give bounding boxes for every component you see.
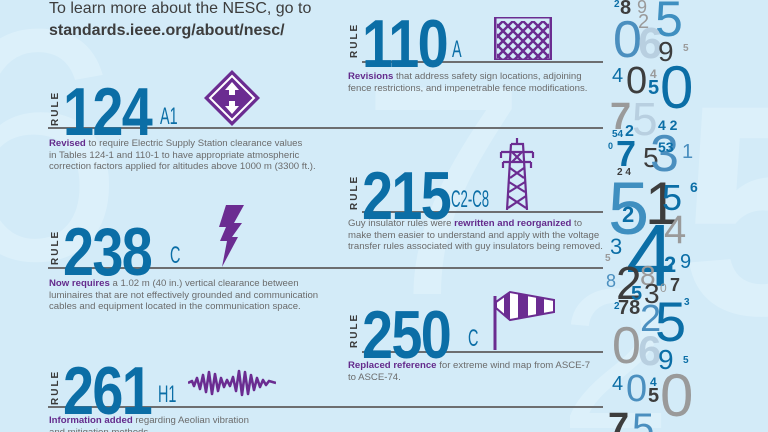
numeral column decoration: 2 xyxy=(625,123,634,140)
rule 238C: 238 xyxy=(63,214,151,290)
rule 124A1: RULE xyxy=(50,91,61,126)
rule 238C xyxy=(49,205,318,312)
numeral column decoration: 2 xyxy=(664,252,676,277)
rule 215C2-C8: RULE xyxy=(349,175,360,210)
rule 215C2-C8: transfer rules associated with guy insulators being removed. xyxy=(348,241,603,252)
rule 261H1: 261 xyxy=(63,353,151,429)
numeral column decoration: 2 xyxy=(638,11,649,33)
rule 124A1: Revised to require Electric Supply Station clearance values xyxy=(49,138,302,149)
rule 261H1: Information added regarding Aeolian vibration xyxy=(49,415,249,426)
numeral column decoration: 0 xyxy=(660,54,693,121)
numeral column decoration: 4 xyxy=(612,65,623,87)
numeral column decoration: 5 xyxy=(662,177,682,218)
background faint numerals: 7 xyxy=(360,22,527,358)
icon: fence xyxy=(494,17,552,60)
rule 215C2-C8: 215 xyxy=(362,158,450,234)
rule 215C2-C8: make them easier to understand and apply with the voltage xyxy=(348,230,599,240)
numeral column decoration: 9 xyxy=(658,344,674,375)
numeral column decoration: 1 xyxy=(682,141,693,163)
numeral column decoration: 0 xyxy=(613,11,642,69)
rule 238C: C xyxy=(170,242,180,269)
numeral column decoration: 4 xyxy=(612,373,623,395)
numeral column decoration: 5 xyxy=(683,355,689,366)
numeral column decoration: 2 4 xyxy=(617,167,631,178)
numeral column decoration: 7 xyxy=(616,133,636,174)
numeral column decoration: 0 xyxy=(608,141,613,151)
rule 250C xyxy=(348,291,590,382)
numeral column decoration: 2 xyxy=(614,301,620,312)
rule 124A1 xyxy=(49,70,316,172)
numeral column decoration: 9 xyxy=(658,36,674,67)
rule 110A: RULE xyxy=(349,23,360,58)
numeral column decoration: 2 xyxy=(622,202,634,227)
rule 238C: cables and equipment located in the communication space. xyxy=(49,301,301,312)
rule 124A1: correction factors applied for altitudes above 1000 m (3300 ft.). xyxy=(49,161,316,172)
rule 238C: Now requires a 1.02 m (40 in.) vertical clearance between xyxy=(49,278,299,289)
numeral column decoration: 0 xyxy=(660,362,693,429)
numeral column decoration: 78 xyxy=(618,297,640,319)
icon: windsock xyxy=(494,291,555,350)
numeral column decoration xyxy=(605,0,698,432)
icon: lightning xyxy=(219,205,244,267)
rule 238C: luminaires that are not effectively grounded and communication xyxy=(49,290,318,300)
numeral column decoration: 5 xyxy=(631,283,642,305)
numeral column decoration: 6 xyxy=(690,179,698,195)
header text xyxy=(49,0,311,39)
numeral column decoration: 3 xyxy=(644,278,660,309)
numeral column decoration: 3 xyxy=(610,234,622,259)
numeral column decoration: 2 xyxy=(616,257,642,309)
numeral column decoration: 5 xyxy=(655,290,686,353)
numeral column decoration: 2 xyxy=(640,298,661,340)
rule 261H1: RULE xyxy=(50,370,61,405)
numeral column decoration: 0 xyxy=(626,368,647,410)
rule 250C: Replaced reference for extreme wind map from ASCE-7 xyxy=(348,360,590,371)
header text: To learn more about the NESC, go to xyxy=(49,0,311,17)
numeral column decoration: 0 xyxy=(612,317,641,375)
numeral column decoration: 4 xyxy=(650,67,657,81)
icon: diamond sign xyxy=(204,70,260,126)
numeral column decoration: 3 xyxy=(684,297,690,308)
rule 261H1: H1 xyxy=(158,381,176,408)
numeral column decoration: 5 xyxy=(608,167,649,250)
numeral column decoration: 4 xyxy=(626,206,675,305)
numeral column decoration: 53 xyxy=(658,139,674,155)
numeral column decoration: 4 2 xyxy=(658,117,677,133)
rule 110A xyxy=(348,12,587,92)
numeral column decoration: 6 xyxy=(638,327,661,374)
numeral column decoration: 3 xyxy=(650,125,679,183)
rule 215C2-C8: C2-C8 xyxy=(451,186,489,213)
rule 250C: RULE xyxy=(349,313,360,348)
rule 124A1: in Tables 124-1 and 110-1 to have appropriate atmospheric xyxy=(49,150,299,160)
numeral column decoration: 0 xyxy=(660,281,667,295)
rule 261H1 xyxy=(49,353,276,432)
rule 215C2-C8: Guy insulator rules were rewritten and reorganized to xyxy=(348,218,582,229)
rule 215C2-C8 xyxy=(348,138,603,252)
numeral column decoration: 8 xyxy=(606,271,616,291)
numeral column decoration: 5 xyxy=(632,93,658,145)
icon: vibration wave xyxy=(188,370,276,396)
numeral column decoration: 6 xyxy=(638,19,662,68)
numeral column decoration: 8 xyxy=(640,260,656,291)
numeral column decoration: 7 xyxy=(670,275,680,295)
rule 250C: C xyxy=(468,325,478,352)
rule 250C: to ASCE-74. xyxy=(348,372,401,382)
rule 124A1: 124 xyxy=(63,74,151,150)
numeral column decoration: 5 xyxy=(648,77,659,99)
rule 250C: 250 xyxy=(362,297,450,373)
rule 238C: RULE xyxy=(50,230,61,265)
header text: standards.ieee.org/about/nesc/ xyxy=(49,22,285,39)
numeral column decoration: 5 xyxy=(643,142,659,173)
numeral column decoration: 9 xyxy=(680,251,691,273)
numeral column decoration: 5 xyxy=(648,385,659,407)
numeral column decoration: 1 xyxy=(645,170,678,237)
numeral column decoration: 54 xyxy=(612,129,623,140)
icon: transmission tower xyxy=(500,138,534,210)
numeral column decoration: 4 xyxy=(664,208,686,252)
rule 110A: A xyxy=(452,36,462,63)
numeral column decoration: 5 xyxy=(605,253,611,264)
rule 124A1: A1 xyxy=(160,103,178,130)
numeral column decoration: 4 xyxy=(650,375,657,389)
numeral column decoration: 7 xyxy=(610,96,631,138)
rule 110A: Revisions that address safety sign locations, adjoining xyxy=(348,71,582,82)
numeral column decoration: 0 xyxy=(626,60,647,102)
numeral column decoration: 5 xyxy=(683,43,689,54)
